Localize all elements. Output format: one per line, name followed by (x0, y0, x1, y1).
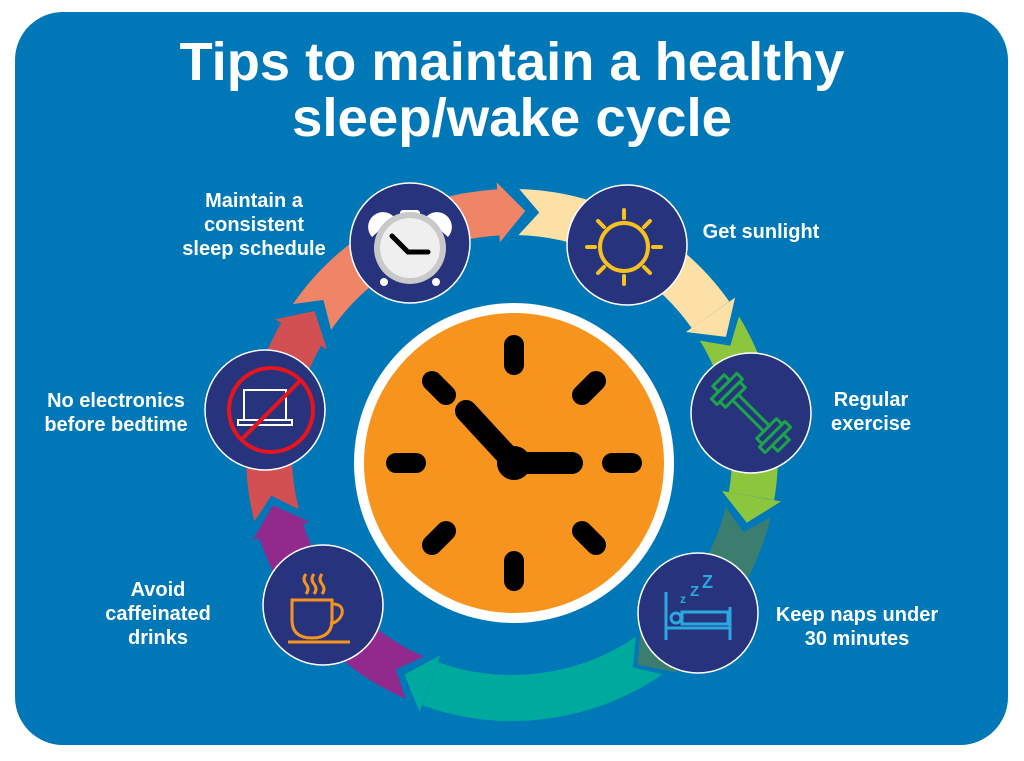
label: exercise: exercise (831, 413, 911, 435)
label: caffeine: Avoid (131, 579, 185, 601)
icon: bed with zzz: Z (702, 572, 713, 592)
label: maintain schedule: consistent (204, 214, 304, 236)
label: caffeine: caffeinated (105, 603, 211, 625)
cycle arrows ring (174, 117, 850, 761)
icon: bed with zzz (638, 553, 758, 673)
label: naps: Keep naps under (776, 604, 938, 626)
label: maintain schedule: Maintain a (205, 190, 303, 212)
label: maintain schedule: sleep schedule (182, 238, 326, 260)
label: electronics: No electronics (47, 390, 185, 412)
icon: alarm clock (350, 183, 470, 303)
icon: no laptop (205, 350, 325, 470)
label: sunlight: Get sunlight (703, 221, 820, 243)
icon: bed with zzz: z (680, 592, 686, 606)
labels (44, 190, 938, 650)
title: sleep/wake cycle (292, 88, 732, 148)
icon: sun (567, 185, 687, 305)
label: naps: 30 minutes (805, 628, 909, 650)
title (180, 32, 844, 148)
label: electronics: before bedtime (44, 414, 188, 436)
ring arrow tips (244, 181, 781, 712)
label: caffeine: drinks (128, 627, 188, 649)
title: Tips to maintain a healthy (180, 32, 844, 92)
ring notches (246, 186, 775, 704)
icon: coffee cup (263, 545, 383, 665)
label: exercise: Regular (834, 389, 908, 411)
icon: bed with zzz: Z (690, 583, 699, 600)
icon: dumbbell (691, 353, 811, 473)
central clock (354, 303, 674, 623)
